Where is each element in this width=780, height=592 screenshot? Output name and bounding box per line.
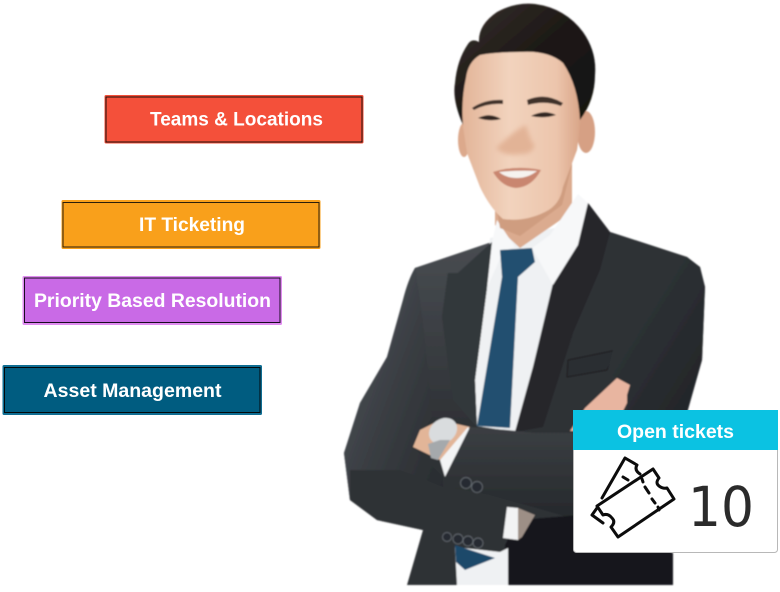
lower hand (518, 508, 535, 540)
face (462, 45, 580, 220)
button: Priority Based Resolution (22, 276, 282, 325)
card header (573, 410, 778, 450)
shirt collar left (487, 220, 515, 288)
card title: Open tickets (617, 421, 734, 443)
eyes (478, 112, 556, 120)
watch (424, 413, 462, 449)
button: Asset Management: Asset Management (44, 381, 222, 402)
right jacket chest (567, 232, 687, 377)
button: Asset Management (2, 365, 262, 415)
right sleeve (607, 257, 705, 413)
lower shirt (503, 507, 518, 540)
button: IT Ticketing (62, 200, 320, 249)
shirt collar right (532, 194, 588, 285)
ear left (458, 123, 470, 157)
hand fingers (570, 378, 630, 431)
left upper sleeve (344, 268, 443, 533)
teeth (499, 171, 537, 178)
button: IT Ticketing: IT Ticketing (139, 215, 245, 236)
card: open tickets (573, 410, 778, 552)
shirt (475, 225, 575, 432)
tie end (455, 545, 495, 570)
open ticket count: 10 (688, 475, 754, 539)
jacket base (344, 203, 705, 585)
right lapel (515, 203, 610, 432)
icon: tickets (592, 458, 674, 537)
tie (477, 248, 535, 428)
button: Teams & Locations: Teams & Locations (150, 110, 323, 130)
illustration: businessman with crossed arms (344, 4, 705, 585)
chest pocket (567, 350, 617, 377)
sleeve buttons (442, 478, 483, 548)
jacket lower right (505, 515, 673, 585)
eyebrows (472, 97, 563, 110)
neck (495, 150, 572, 248)
wrist and hand (413, 420, 470, 460)
shirt bottom (455, 547, 508, 585)
button: Teams & Locations (104, 95, 364, 144)
torso left panel (415, 242, 492, 427)
button: Priority Based Resolution: Priority Based Resolution (34, 291, 271, 312)
ear right (577, 111, 595, 153)
forearm sleeve (445, 427, 578, 520)
shirt cuff (440, 427, 472, 477)
hair (454, 4, 595, 125)
nose shadow (496, 125, 535, 155)
neck shadow (496, 165, 572, 236)
watch strap (428, 440, 450, 460)
left lapel (442, 242, 492, 427)
lower sleeve (350, 470, 505, 552)
lips (493, 168, 541, 188)
